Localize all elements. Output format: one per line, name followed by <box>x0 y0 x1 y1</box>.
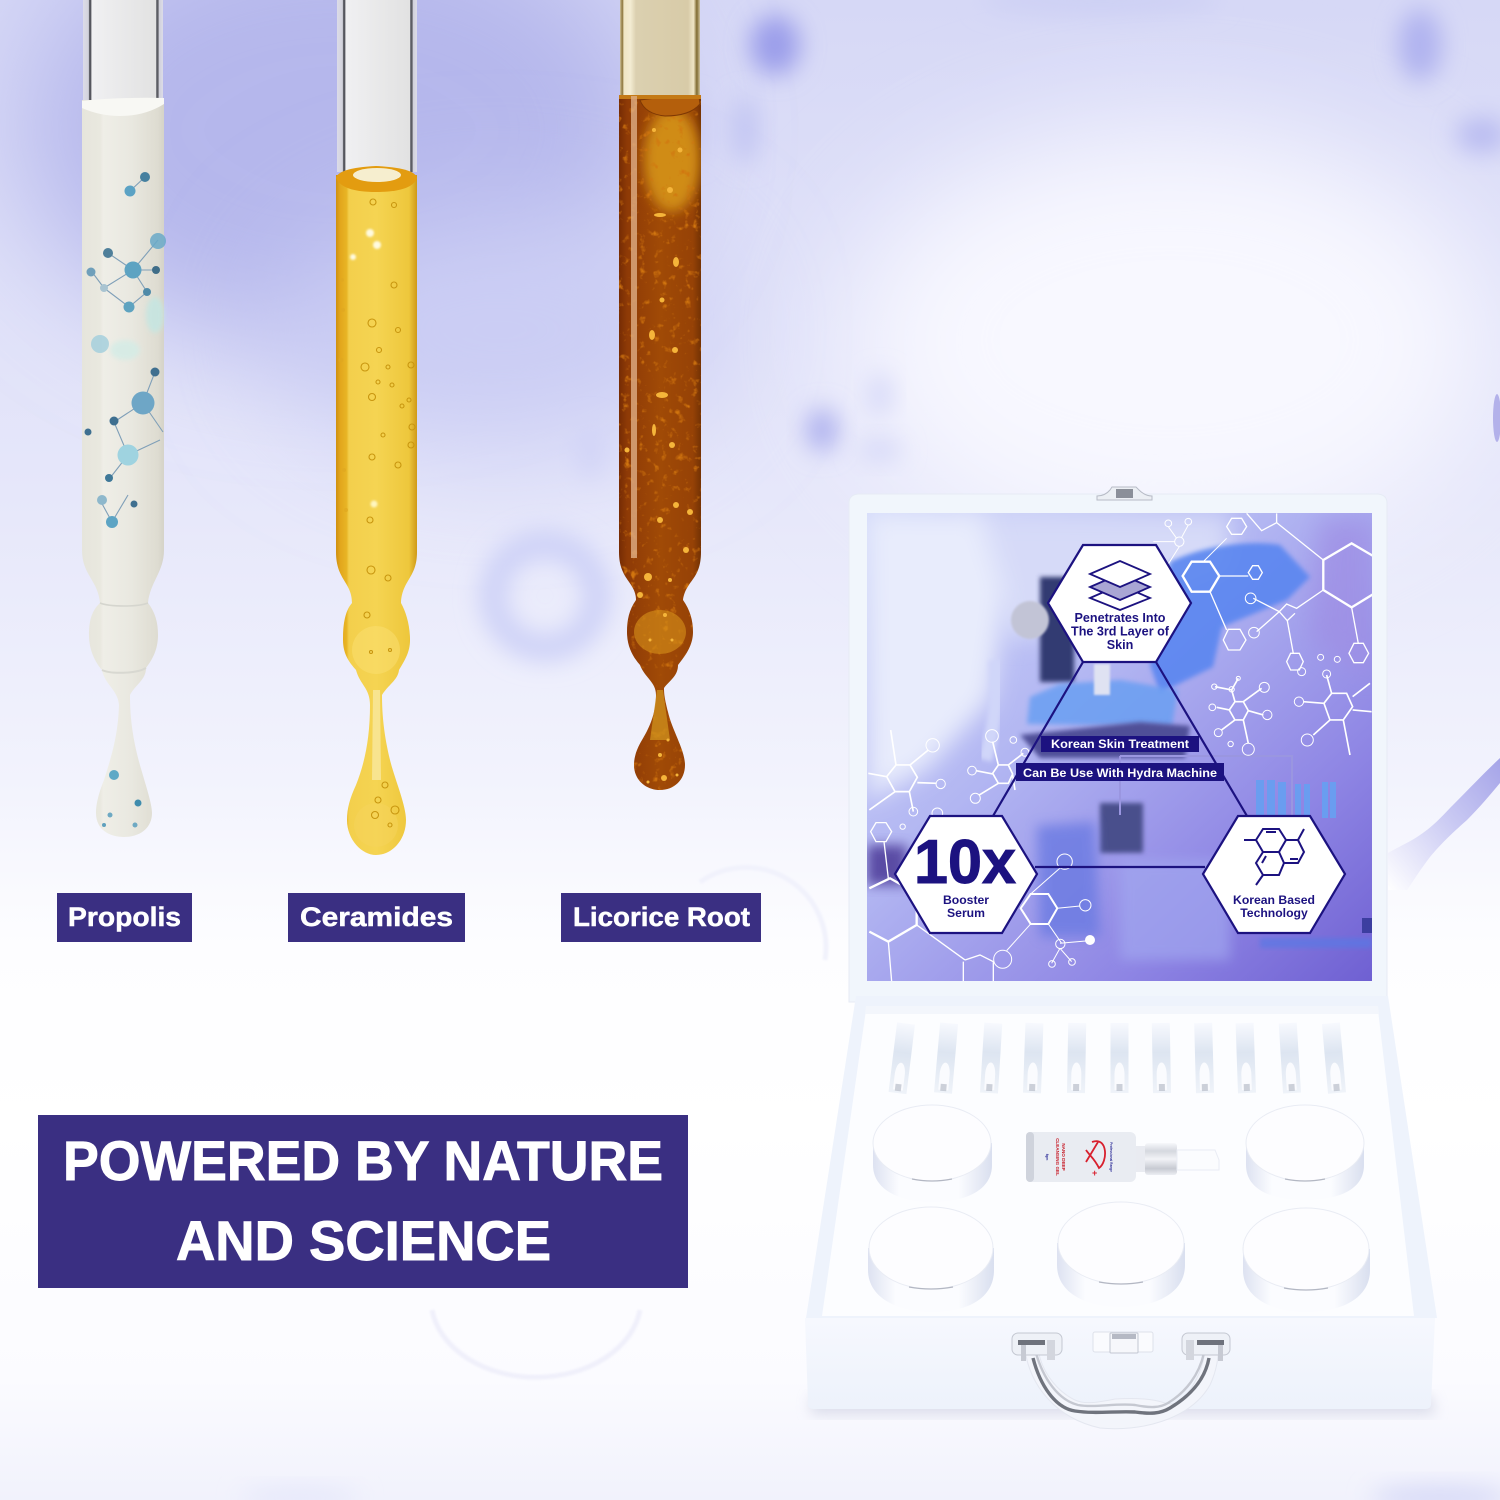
lid picture: laboratory scene <box>867 513 1380 982</box>
headline banner: AND SCIENCE <box>176 1209 551 1272</box>
bubbles <box>361 199 415 827</box>
hexagon: penetrates into 3rd layer: The 3rd Layer of <box>1071 624 1170 638</box>
center clasp <box>1093 1332 1153 1353</box>
icon: skin layers <box>1090 561 1150 610</box>
glass tube <box>620 0 700 98</box>
case base tray <box>805 996 1437 1409</box>
banner: Korean Skin Treatment: Korean Skin Treatment <box>1051 737 1189 751</box>
hexagon: Korean based technology: Technology <box>1240 906 1308 920</box>
hexagon: penetrates into 3rd layer: Penetrates Into <box>1075 611 1166 625</box>
gold flecks <box>624 128 693 784</box>
blurred lab photo <box>867 513 1372 960</box>
bottle label: NANO DEEP <box>1061 1143 1066 1171</box>
case shadow <box>810 1395 1436 1414</box>
hexagon: 10x booster serum: Booster <box>943 893 989 907</box>
left bracket <box>1012 1333 1062 1361</box>
cleansing gel bottle <box>1026 1132 1219 1182</box>
hexagon: 10x booster serum <box>895 816 1037 933</box>
hexagon: Korean based technology <box>1203 816 1345 933</box>
cleansing gel bottle: Professional Range <box>1109 1142 1113 1172</box>
hexagon: Korean based technology: Korean Based <box>1233 893 1315 907</box>
front face <box>805 1318 1435 1409</box>
pipette: Ceramides <box>336 0 417 855</box>
milky liquid and drop <box>82 100 164 837</box>
glass tube <box>83 0 163 102</box>
molecule network <box>92 177 163 522</box>
product case <box>805 487 1437 1429</box>
pipette: Propolis <box>82 0 166 837</box>
cleansing gel bottle: CLEANSING GEL <box>1055 1138 1060 1176</box>
hexagon: 10x booster serum: 10x <box>914 828 1017 897</box>
amber liquid and drop <box>619 95 701 790</box>
hexagon: penetrates into 3rd layer: Skin <box>1107 638 1133 652</box>
label: Propolis <box>57 893 192 942</box>
logo <box>1086 1141 1105 1168</box>
golden liquid and drop <box>336 175 417 855</box>
lid clasp <box>1097 487 1152 500</box>
label: Ceramides <box>288 893 465 942</box>
right bracket <box>1182 1333 1230 1361</box>
glass tube <box>337 0 417 172</box>
headline banner <box>38 1115 688 1288</box>
hexagon: penetrates into 3rd layer <box>1048 545 1191 662</box>
connecting triangle <box>993 662 1247 867</box>
jars <box>868 1105 1370 1312</box>
banner: Can Be Use With Hydra Machine <box>1016 763 1224 781</box>
label: Ceramides: Ceramides <box>300 902 453 932</box>
lid frame <box>849 494 1387 1002</box>
label: Licorice Root: Licorice Root <box>573 902 750 932</box>
hexagon: 10x booster serum: Serum <box>947 906 985 920</box>
glass tube: curved tube at right edge <box>1388 758 1500 890</box>
headline banner: POWERED BY NATURE <box>63 1129 663 1192</box>
pipette: Licorice Root <box>619 0 701 790</box>
cleansing gel bottle: + <box>1092 1168 1097 1178</box>
white molecule network <box>868 513 1380 982</box>
vial slots <box>889 1022 1346 1094</box>
chrome handle <box>1025 1345 1218 1429</box>
cleansing gel bottle: 8gm <box>1045 1154 1049 1160</box>
banner: Can Be Use With Hydra Machine: Can Be Use With Hydra Machine <box>1023 766 1217 780</box>
handle and clasp <box>1012 1332 1230 1429</box>
label: Licorice Root <box>561 893 761 942</box>
icon: molecule <box>1244 829 1304 885</box>
label: Propolis: Propolis <box>68 902 181 932</box>
